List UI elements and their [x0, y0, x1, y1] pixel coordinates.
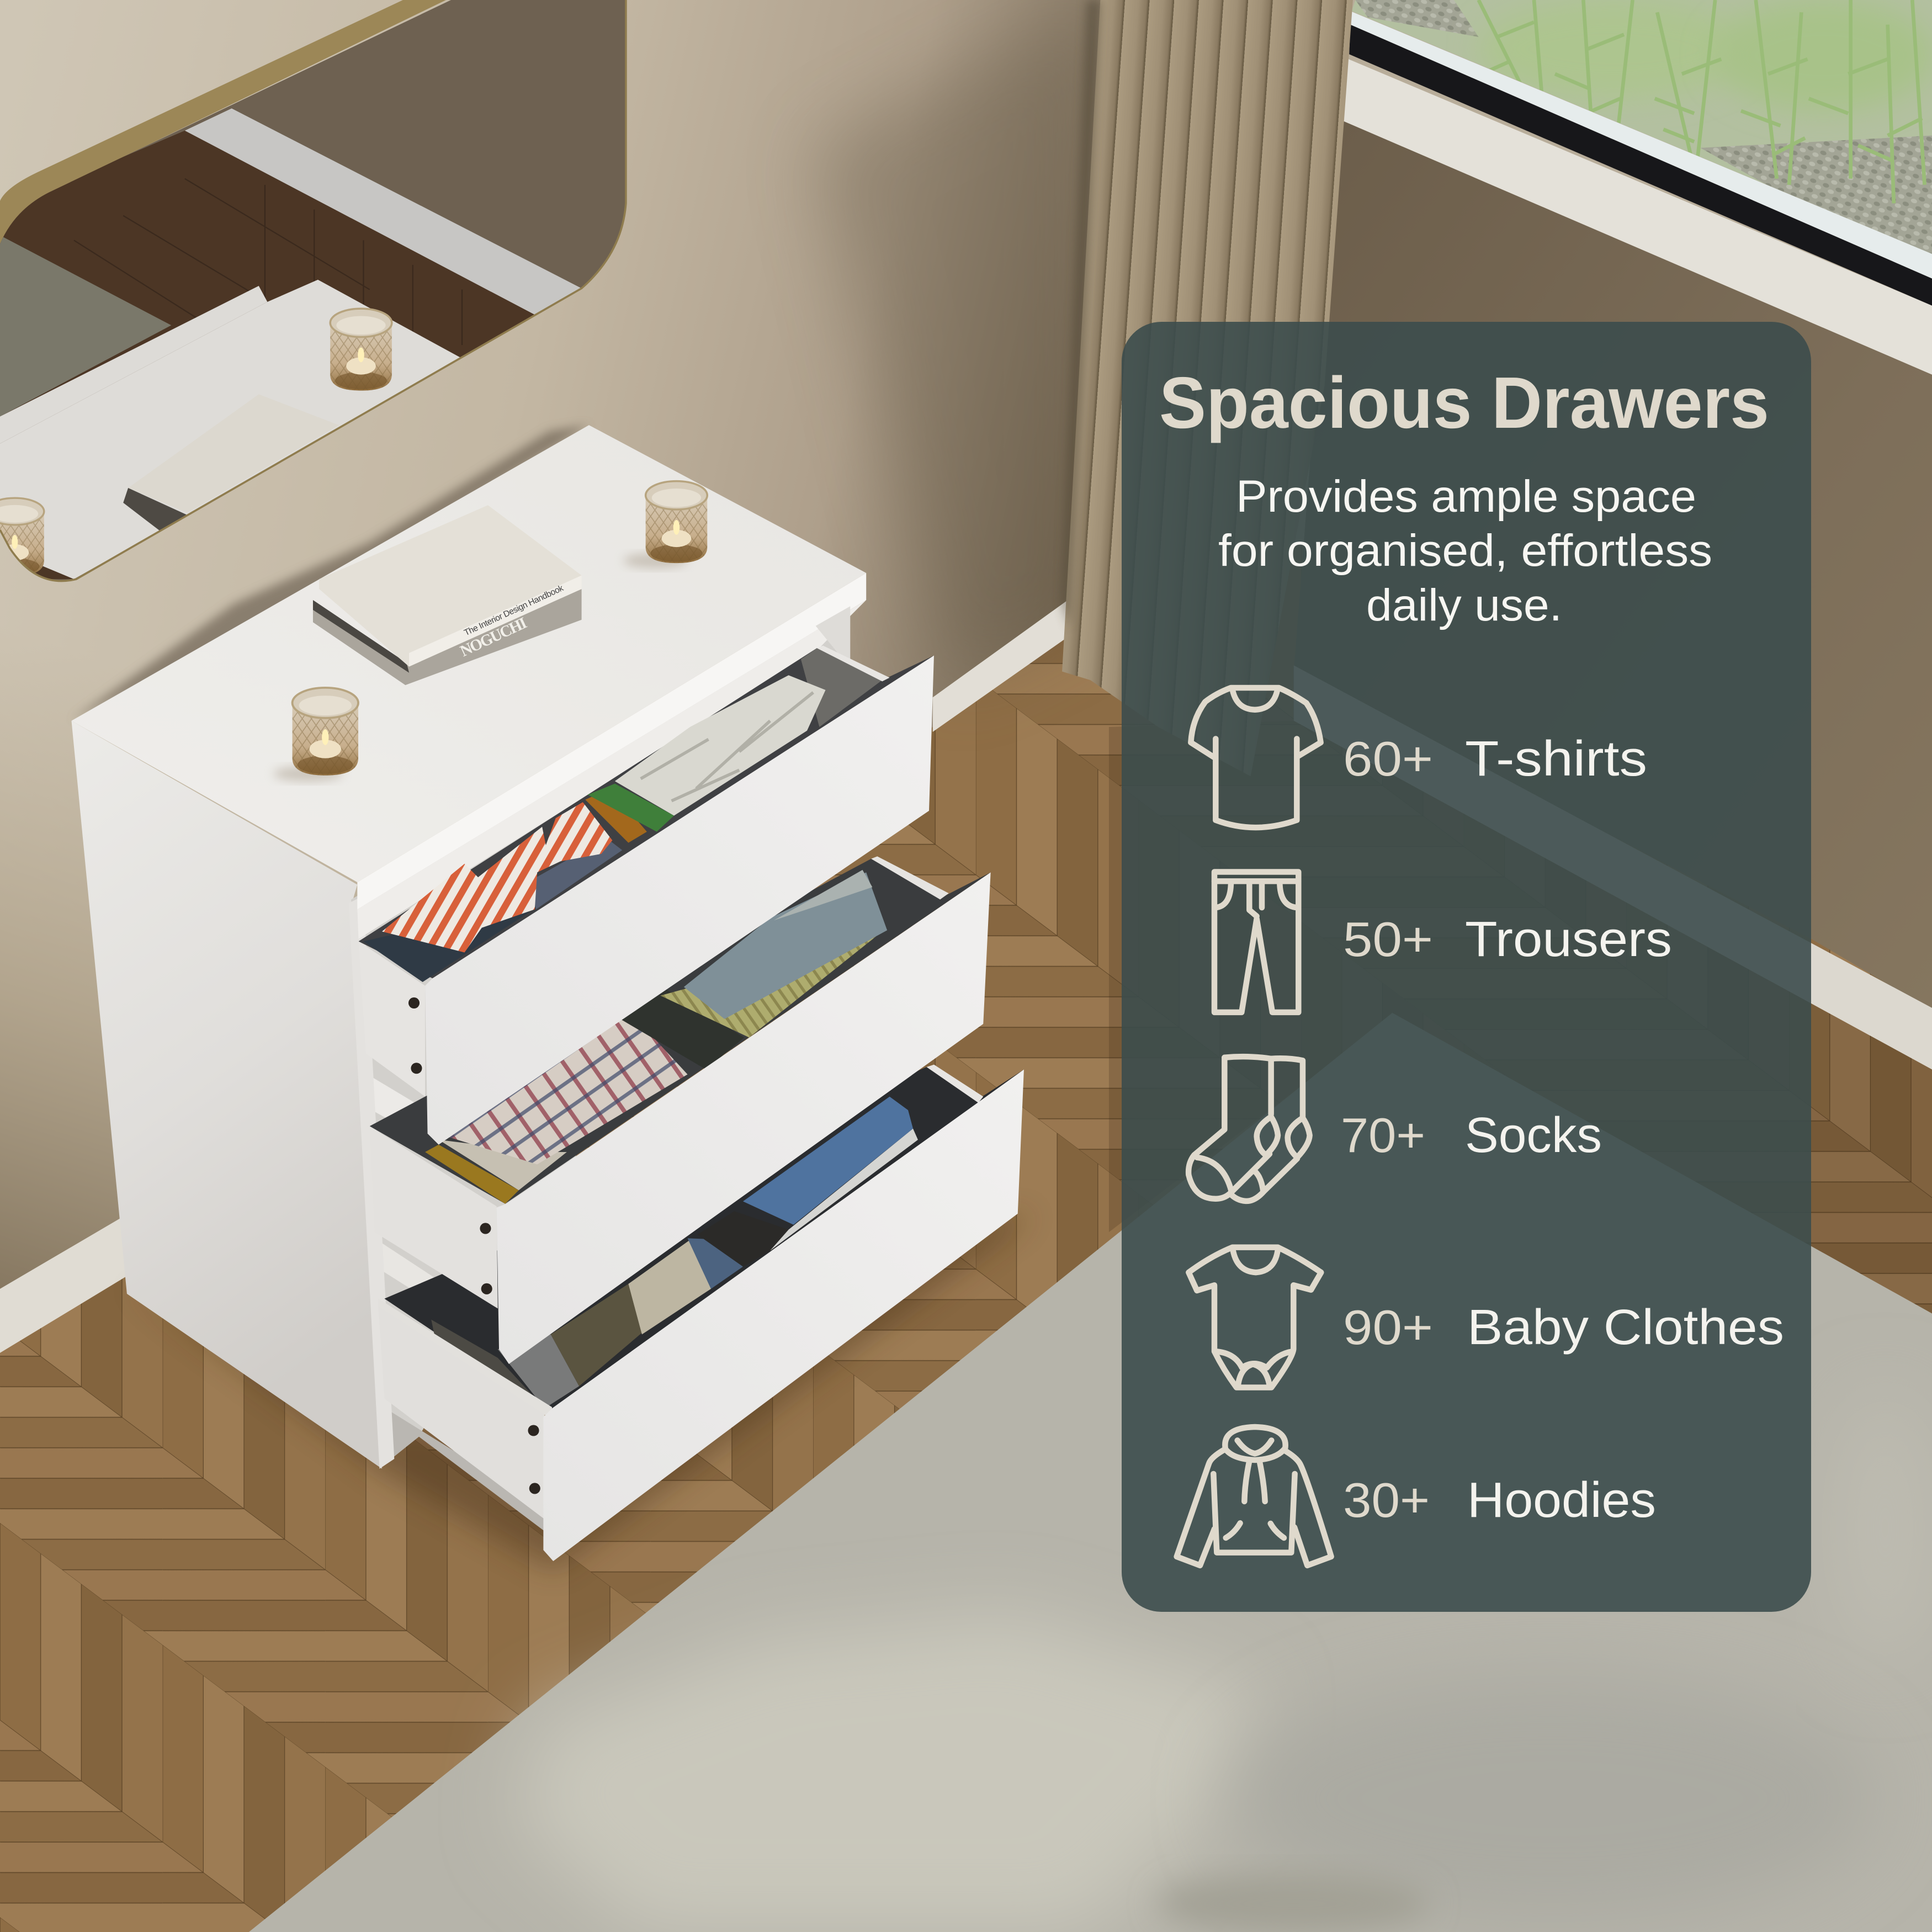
- label: socks: Socks: [1465, 1108, 1602, 1163]
- panel: spacious drawers: [1122, 322, 1811, 1612]
- bottom drawer interior and clothes: [384, 1067, 1024, 1411]
- count: 70+: 70+: [1341, 1108, 1425, 1163]
- label: hoodies: Hoodies: [1467, 1473, 1656, 1528]
- cabinet top: [71, 425, 866, 882]
- top drawer holes: [408, 997, 422, 1074]
- wood herringbone floor: [0, 542, 1932, 1932]
- description text: [1218, 471, 1712, 630]
- label: t-shirts: T-shirts: [1465, 731, 1647, 787]
- cabinet front strip: [349, 896, 394, 1469]
- right wall and baseboard: [1109, 118, 1932, 1318]
- count: 60+: 60+: [1343, 731, 1433, 786]
- cabinet front opening: [351, 604, 850, 1466]
- mirrored candle left: [0, 498, 44, 576]
- bottom drawer side: [378, 1306, 545, 1519]
- item: baby clothes: [1188, 1248, 1784, 1387]
- left plaster wall: [0, 0, 1109, 1325]
- middle drawer front: [497, 872, 991, 1364]
- candle on top left: [274, 688, 358, 781]
- top drawer side: [359, 941, 425, 1097]
- shadow behind dresser: [71, 425, 589, 721]
- middle drawer: [370, 856, 991, 1364]
- books on top: NOGUCHI: [458, 614, 530, 660]
- icon: hoodie: [1177, 1427, 1331, 1565]
- white chest of drawers: [71, 425, 1024, 1561]
- curtain: [1062, 0, 1353, 776]
- description text: Provides ample space: [1236, 471, 1696, 522]
- middle drawer interior and clothes: [370, 859, 991, 1204]
- top drawer: [359, 646, 934, 1145]
- bottom drawer front: [543, 1069, 1024, 1561]
- window with ferns: [1337, 0, 1932, 375]
- count: 30+: 30+: [1343, 1473, 1430, 1527]
- label: trousers: Trousers: [1465, 912, 1672, 967]
- books on top: [313, 505, 582, 685]
- count: 50+: 50+: [1343, 912, 1433, 967]
- middle drawer side: [370, 1126, 498, 1309]
- cabinet side panel: [71, 721, 382, 1469]
- item: t-shirts: [1191, 688, 1647, 827]
- left baseboard: [0, 599, 1069, 1353]
- title: Spacious Drawers: [1159, 362, 1769, 443]
- label: baby clothes: Baby Clothes: [1467, 1300, 1784, 1355]
- icon: t-shirt: [1191, 688, 1321, 827]
- count: 90+: 90+: [1343, 1300, 1433, 1355]
- top drawer interior and clothes: [359, 648, 934, 982]
- description text: for organised, effortless: [1218, 526, 1712, 576]
- description text: daily use.: [1366, 580, 1562, 630]
- item: socks: [1188, 1057, 1602, 1201]
- item: hoodies: [1177, 1427, 1656, 1565]
- panel background: [1122, 322, 1811, 1612]
- icon: socks: [1188, 1057, 1310, 1201]
- floor shadow below dresser: [123, 1214, 1035, 1571]
- bottom drawer holes: [528, 1425, 540, 1494]
- middle drawer holes: [480, 1223, 492, 1294]
- bottom drawer: [378, 1065, 1024, 1561]
- rug: [249, 1013, 1932, 1932]
- wall mirror with reflection: [0, 0, 641, 591]
- icon: trousers: [1214, 872, 1298, 1012]
- icon: baby bodysuit: [1188, 1248, 1321, 1387]
- candle on top right: [623, 481, 707, 568]
- top drawer front: [425, 655, 934, 1145]
- mirrored candle right: [330, 309, 392, 391]
- item: trousers: [1214, 872, 1672, 1012]
- book spine titles: The Interior Design Handbook: [463, 583, 565, 638]
